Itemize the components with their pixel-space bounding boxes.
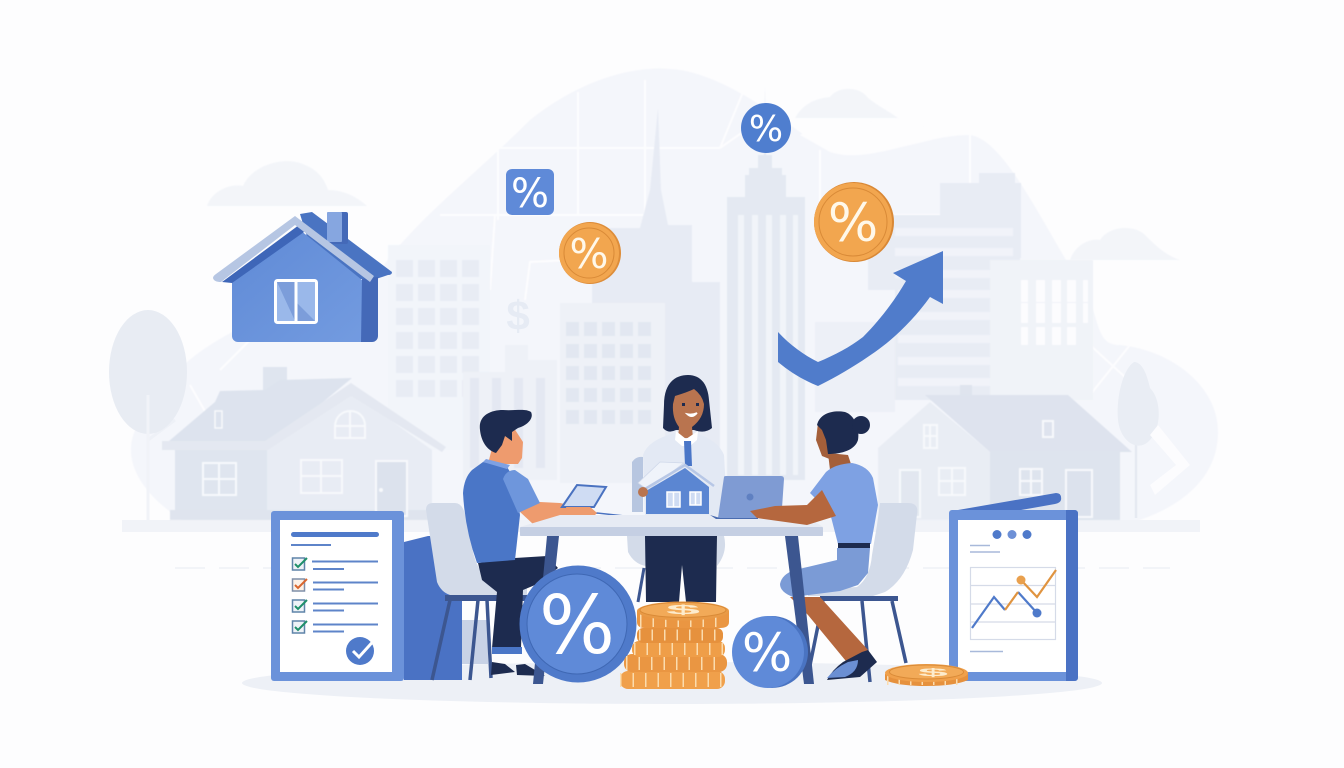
checklist row 1 <box>292 558 378 570</box>
small percent coin: % <box>742 623 792 684</box>
icon: large orange percent coin: % <box>828 193 878 254</box>
building: left grid tower <box>388 245 490 450</box>
icon: blue percent badge: % <box>511 171 549 217</box>
woman shoe <box>827 650 877 680</box>
background house: left <box>162 367 446 520</box>
woman bun <box>852 416 870 434</box>
roof trim <box>213 216 374 282</box>
building: mid block <box>560 303 665 483</box>
arrow: rising trend <box>778 251 943 386</box>
person: center advisor <box>643 375 726 602</box>
background house: right <box>878 385 1132 520</box>
advisor pants <box>645 536 717 602</box>
table right leg <box>785 536 814 684</box>
coin on floor <box>885 664 968 686</box>
advisor face <box>673 389 704 438</box>
man neck and face <box>488 425 523 464</box>
right side chevron <box>1150 425 1190 495</box>
man arm <box>519 502 597 524</box>
advisor hair back <box>663 375 712 432</box>
ground strip <box>122 520 1200 532</box>
woman belt <box>838 543 870 548</box>
table <box>520 515 823 684</box>
document: checklist <box>271 511 404 681</box>
clouds <box>207 89 1180 260</box>
tree: right <box>1118 362 1159 518</box>
man hair <box>480 410 532 453</box>
checklist row 3 <box>292 600 378 612</box>
document: chart report <box>949 493 1078 681</box>
house window <box>276 280 316 323</box>
building: central skyscraper <box>727 85 805 480</box>
background city map blob <box>131 69 1218 530</box>
man vest <box>463 462 520 563</box>
top coin: $ <box>666 602 704 617</box>
icon: small orange percent coin <box>559 222 621 284</box>
folder behind checklist <box>404 536 488 680</box>
man cuff <box>492 647 522 654</box>
coin 4 <box>624 654 727 672</box>
dashed ground line <box>175 567 1170 569</box>
large percent coin <box>520 566 636 682</box>
advisor eyes <box>682 403 699 406</box>
advisor shirt <box>643 433 726 517</box>
table left leg <box>533 536 559 684</box>
line chart <box>970 568 1056 640</box>
icon: blue percent circle top <box>741 103 791 153</box>
roof right slope <box>300 212 392 279</box>
icon: blue house <box>213 212 392 342</box>
woman shirt <box>810 463 878 544</box>
wall shade <box>361 277 378 342</box>
floor shadow <box>242 662 1102 704</box>
woman neck <box>828 453 852 470</box>
building: spire tower <box>592 108 720 480</box>
man pants <box>478 556 558 648</box>
large percent coin: % <box>539 579 615 672</box>
chimney <box>327 212 348 244</box>
woman face <box>816 420 834 460</box>
background dollar sign: $ <box>506 292 530 339</box>
tree: left <box>109 310 187 520</box>
right chair <box>807 503 917 682</box>
man collar <box>483 459 510 469</box>
checklist row 2 <box>292 579 378 591</box>
bottom coin <box>620 671 725 689</box>
icon: small orange percent coin: % <box>570 230 608 278</box>
house wall <box>232 230 362 342</box>
person: man on left <box>463 410 597 676</box>
center chair <box>627 457 725 602</box>
man sleeve <box>503 470 540 513</box>
man shoes <box>491 662 545 676</box>
left chair <box>426 503 527 680</box>
model house on table <box>638 462 714 514</box>
icon: blue percent circle top: % <box>749 109 783 150</box>
checklist row 4 <box>292 621 378 633</box>
woman skirt <box>780 548 870 597</box>
icon: large orange percent coin <box>814 182 894 262</box>
woman arm on laptop <box>750 490 836 525</box>
background skyline <box>388 85 1093 483</box>
woman hair <box>817 411 858 454</box>
window dots <box>992 530 1032 539</box>
coin stack <box>620 602 729 689</box>
coin on floor: $ <box>918 667 948 679</box>
heading line <box>291 532 379 537</box>
coin 2 <box>637 628 723 643</box>
roof underside <box>222 225 304 283</box>
coin 3 <box>632 641 725 657</box>
person: woman on right <box>780 411 878 680</box>
approved check badge <box>346 636 378 665</box>
building: right window block <box>990 260 1093 400</box>
building: right stepped block <box>815 173 1021 412</box>
advisor smile <box>687 413 697 416</box>
tablet and paper <box>562 485 634 521</box>
small percent coin <box>732 616 808 688</box>
advisor collar <box>675 431 698 446</box>
woman leg <box>790 597 868 666</box>
advisor tie <box>684 441 692 466</box>
laptop <box>710 476 784 519</box>
building: small block <box>463 345 557 480</box>
